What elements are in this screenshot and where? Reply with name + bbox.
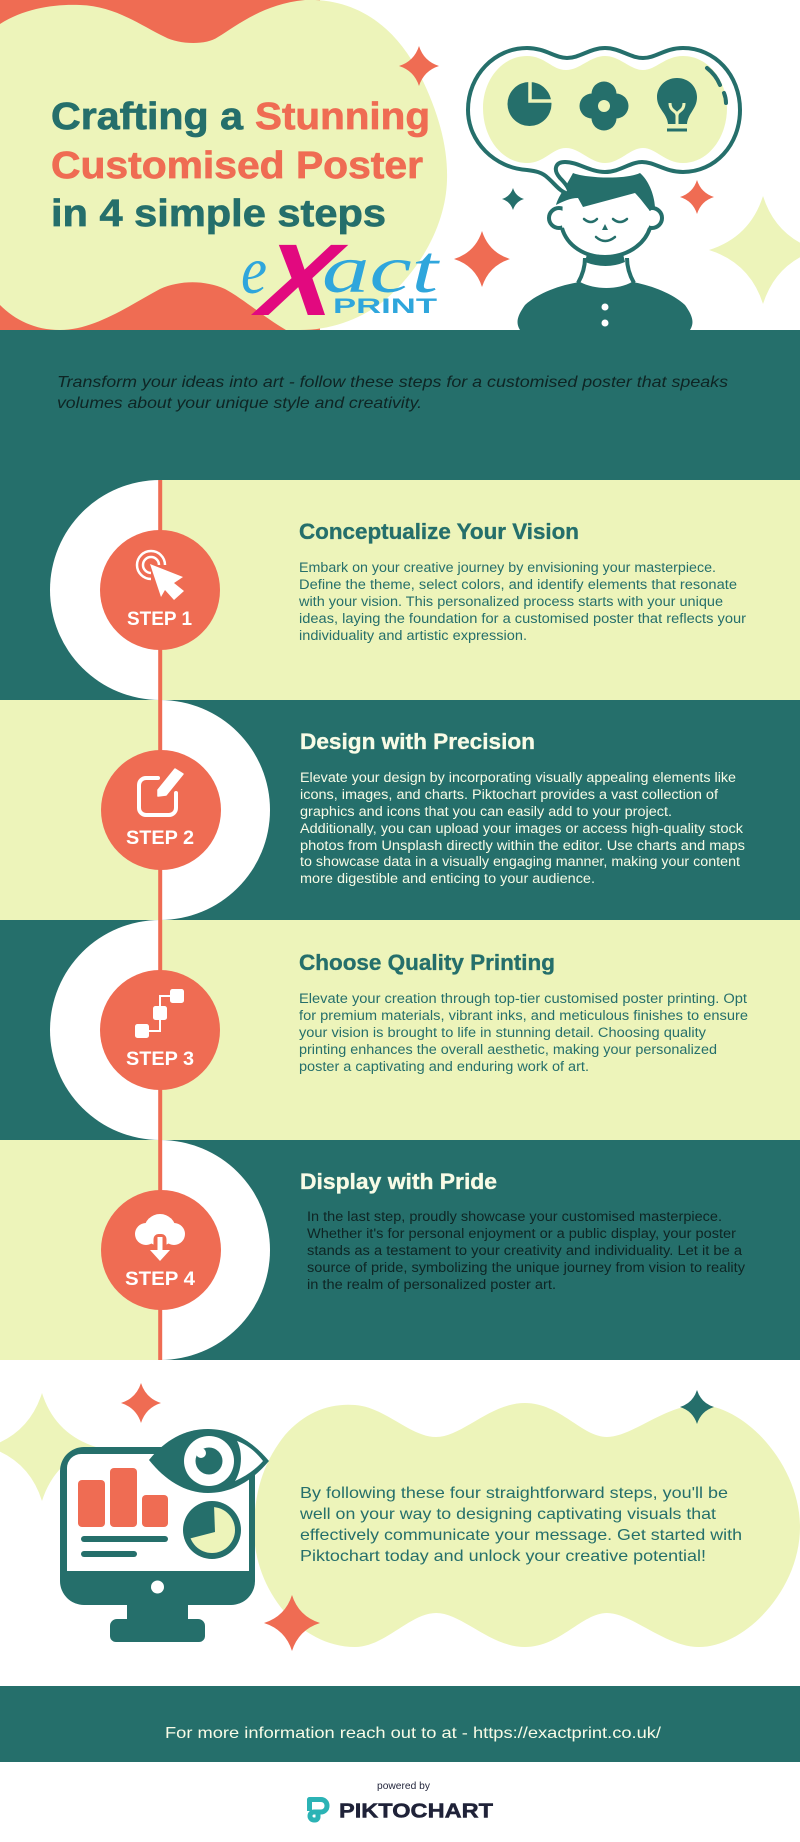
panel: step 1 background	[0, 480, 800, 700]
panel: step 2 background	[0, 700, 800, 920]
logo: eXact Print: X	[242, 224, 359, 337]
conclusion text: well on your way to designing captivating visuals that	[299, 1506, 717, 1523]
step 1 body text: individuality and artistic expression.	[299, 628, 527, 643]
step 4 body text: In the last step, proudly showcase your customised masterpiece.	[307, 1209, 722, 1224]
pie chart	[183, 1501, 241, 1559]
step 2 body text: Additionally, you can upload your images or access high-quality stock	[300, 821, 743, 836]
chin shadow	[585, 254, 625, 266]
eye	[149, 1429, 269, 1493]
step 2 badge	[101, 750, 221, 870]
step 3 body text: Elevate your creation through top-tier customised poster printing. Opt	[299, 991, 747, 1006]
icon: sparkle teal conclusion	[680, 1390, 714, 1424]
conclusion text: By following these four straightforward steps, you'll be	[300, 1485, 728, 1502]
icon: sparkle cream conclusion	[0, 1393, 96, 1501]
body	[518, 282, 692, 330]
icon: sparkle coral conclusion bottom	[264, 1595, 320, 1651]
icon: sparkle coral conclusion top	[121, 1383, 161, 1423]
step 1 body text: Embark on your creative journey by envisioning your masterpiece.	[299, 560, 716, 575]
step 3 badge: STEP 3	[126, 1048, 194, 1070]
ears	[549, 208, 662, 228]
contact text: For more information reach out to at - https://exactprint.co.uk/	[165, 1725, 662, 1742]
step 2 body text: Elevate your design by incorporating visually appealing elements like	[300, 770, 736, 785]
step 2 badge: STEP 2	[126, 827, 194, 849]
step 4 body text: source of pride, symbolizing the unique journey from vision to reality	[307, 1260, 745, 1275]
panel: intro band	[0, 330, 800, 480]
panel: contact band	[0, 1686, 800, 1762]
step 2 body text: more digestible and enticing to your audience.	[300, 871, 595, 886]
icon: sparkle coral right of person	[680, 180, 714, 214]
conclusion text	[299, 1485, 742, 1565]
buttons	[602, 304, 608, 326]
icon: sparkle coral top	[399, 46, 439, 86]
nose	[602, 224, 608, 230]
icon: thought bubble	[468, 48, 740, 194]
step 1 badge: STEP 1	[127, 608, 192, 630]
logo: eXact Print	[241, 224, 441, 337]
eyes and mouth	[584, 219, 627, 241]
title: Customised Poster	[51, 145, 423, 187]
monitor button	[151, 1580, 164, 1594]
step 1 badge	[100, 530, 220, 650]
text lines	[81, 1536, 168, 1557]
step 4 heading: Display with Pride	[300, 1169, 497, 1194]
logo: eXact Print: act	[322, 231, 441, 307]
step 3 body text: for premium materials, vibrant inks, and meticulous finishes to ensure	[299, 1008, 748, 1023]
logo: Piktochart: PIKTOCHART	[339, 1800, 493, 1822]
neck	[578, 258, 634, 283]
icon: flower	[580, 82, 628, 130]
logo: Piktochart	[310, 1800, 493, 1822]
logo: eXact Print: e	[241, 232, 267, 308]
step 3 body text: poster a captivating and enduring work of art.	[299, 1059, 589, 1074]
powered by label: powered by	[377, 1780, 431, 1792]
face	[562, 195, 649, 257]
title: Crafting a	[51, 96, 244, 138]
step 4 body text: in the realm of personalized poster art.	[307, 1277, 556, 1292]
jaw line	[562, 228, 650, 257]
step 4 badge: STEP 4	[125, 1268, 195, 1290]
icon: sparkle teal	[502, 188, 524, 210]
step 1 body text: ideas, laying the foundation for a customised poster that reflects your	[299, 611, 747, 626]
step 1 body text	[298, 560, 747, 643]
monitor body	[60, 1447, 255, 1605]
step 3 badge	[100, 970, 220, 1090]
monitor screen	[67, 1454, 249, 1571]
monitor stand	[110, 1600, 205, 1642]
step 4 body text	[307, 1209, 745, 1292]
step 2 body text	[300, 770, 745, 886]
title: in 4 simple steps	[51, 193, 386, 235]
logo: eXact Print: PRINT	[333, 295, 437, 318]
panel: step 4 background	[0, 1140, 800, 1360]
step 2 body text: icons, images, and charts. Piktochart provides a vast collection of	[300, 787, 718, 802]
conclusion text: effectively communicate your message. Get started with	[300, 1527, 742, 1544]
step 3 body text: your vision is brought to life in stunning detail. Choosing quality	[299, 1025, 706, 1040]
intro text: Transform your ideas into art - follow these steps for a customised poster that speaks	[57, 374, 728, 391]
panel: header blob	[0, 0, 447, 330]
step 4 body text: Whether it's for personal enjoyment or a public display, your poster	[307, 1226, 737, 1241]
hair	[556, 173, 655, 211]
icon: monitor with chart and eye	[60, 1429, 269, 1642]
step 1 heading: Conceptualize Your Vision	[299, 519, 579, 544]
bar chart	[78, 1468, 168, 1527]
conclusion text: Piktochart today and unlock your creative potential!	[300, 1548, 706, 1565]
step 4 badge	[101, 1190, 221, 1310]
icon: sparkle cream large	[709, 196, 800, 304]
intro text: volumes about your unique style and creativity.	[57, 395, 422, 412]
step 3 heading: Choose Quality Printing	[299, 950, 555, 975]
step 2 heading: Design with Precision	[300, 729, 535, 754]
step 4 body text: stands as a testament to your creativity and individuality. Let it be a	[307, 1243, 743, 1258]
step 2 body text: photos from Unsplash directly within the editor. Use charts and maps	[300, 838, 745, 853]
step 2 body text: to showcase data in a visually engaging manner, making your content	[300, 854, 740, 869]
intro text	[57, 374, 728, 412]
step 1 body text: with your vision. This personalized process starts with your unique	[298, 594, 723, 609]
title: Stunning	[255, 96, 430, 138]
title	[51, 96, 430, 235]
icon: person	[518, 173, 692, 330]
timeline line	[158, 480, 162, 1360]
step 1 body text: Define the theme, select colors, and identify elements that resonate	[299, 577, 737, 592]
conclusion blob	[254, 1403, 800, 1647]
step 3 body text	[299, 991, 748, 1074]
icon: pie chart	[508, 81, 553, 126]
icon: light bulb	[657, 78, 697, 130]
panel: step 3 background	[0, 920, 800, 1140]
step 2 body text: graphics and icons that you can easily add to your project.	[300, 804, 672, 819]
step 3 body text: printing enhances the overall aesthetic, making your personalized	[299, 1042, 717, 1057]
icon: sparkle coral left of person	[454, 231, 510, 287]
